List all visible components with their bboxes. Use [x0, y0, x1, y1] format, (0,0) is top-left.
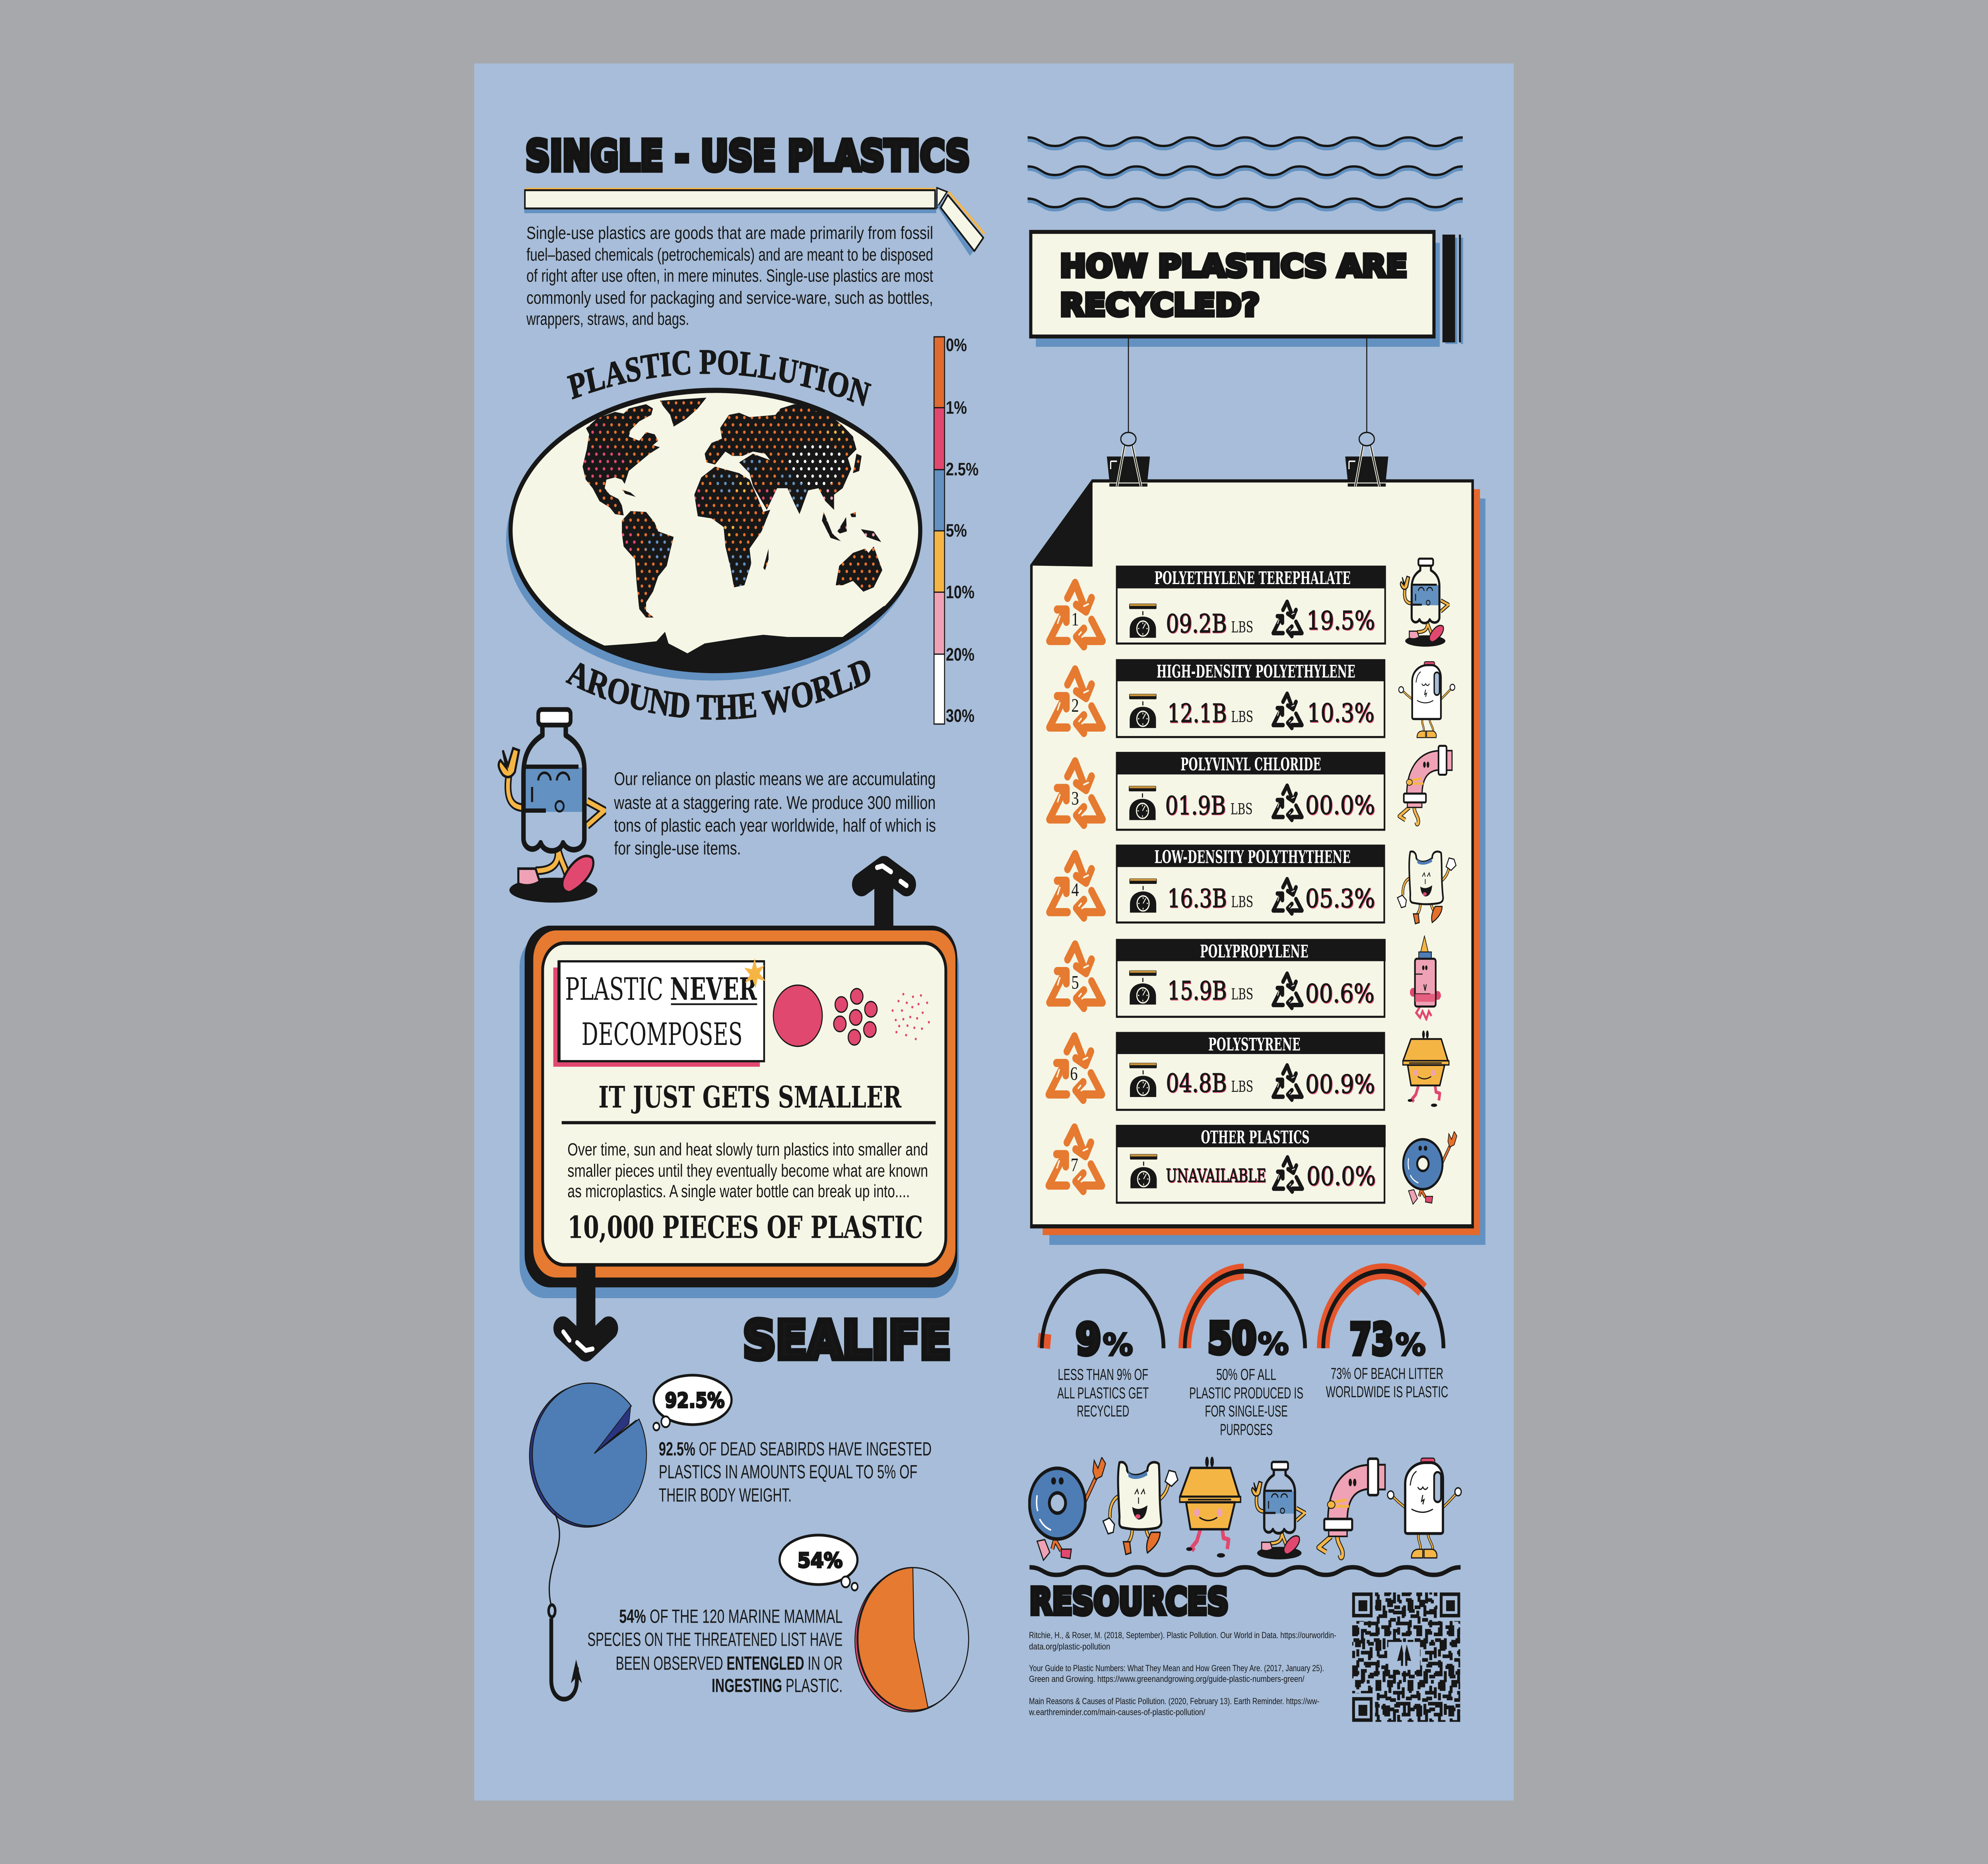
character: bottle row 1 [1400, 559, 1448, 647]
gauge: 50% single-use: % [1258, 1327, 1289, 1362]
references text: Ritchie, H., & Roser, M. (2018, September). Plastic Pollution. Our World in Data. https://ourworldin- [1029, 1631, 1336, 1640]
row 1: polyethylene terephalate: 1 [1072, 609, 1079, 630]
legend: colour scale: 20% [946, 644, 975, 664]
poster panel [474, 63, 1514, 1801]
row 3: polyvinyl chloride: 01.9B [1165, 790, 1226, 820]
callout: plastic never decomposes: PLASTIC NEVER [565, 971, 757, 1007]
reliance paragraph: for single-use items. [614, 838, 741, 858]
references text: data.org/plastic-pollution [1029, 1642, 1110, 1652]
character lineup [1029, 1456, 1461, 1560]
legend: colour scale: 0% [946, 334, 967, 355]
speech bubble: 92.5%: 92.5% [665, 1388, 724, 1413]
text: seabirds statistic [659, 1439, 932, 1506]
gauge: 9% recycled: ALL PLASTICS GET [1057, 1384, 1149, 1402]
row 4: low-density polythythene: 05.3% [1305, 883, 1375, 913]
heading: plastic pollution arc: PLASTIC POLLUTION [565, 342, 874, 414]
character: bottle mascot [499, 709, 604, 903]
row 2: high-density polyethylene: LBS [1231, 709, 1253, 726]
sign body text [567, 1139, 928, 1201]
callout: 10,000 pieces of plastic: 10,000 PIECES OF PLASTIC [567, 1210, 923, 1245]
speech bubble: 92.5% [653, 1375, 732, 1430]
speech bubble: 54% [780, 1535, 858, 1590]
panel: how plastics are recycled title board: RECYCLED? [1060, 287, 1260, 323]
row 5: polypropylene: 5 [1072, 972, 1079, 993]
hanging strings [1128, 338, 1367, 433]
row 6: polystyrene: 04.8B [1167, 1069, 1227, 1099]
gauge: 9% recycled: 9 [1076, 1315, 1101, 1364]
row 3: polyvinyl chloride: 00.0% [1306, 791, 1376, 821]
row 5: polypropylene: 15.9B [1167, 976, 1227, 1006]
row 6: polystyrene: 6 [1070, 1063, 1077, 1084]
speech bubble: 54%: 54% [798, 1549, 843, 1573]
gauge: 9% recycled: RECYCLED [1077, 1402, 1129, 1420]
intro paragraph: wrappers, straws, and bags. [526, 309, 689, 329]
legend: colour scale: 10% [946, 581, 975, 602]
text: marine mammals statistic: INGESTING PLASTIC. [712, 1676, 843, 1697]
callout: plastic never decomposes [553, 958, 766, 1067]
gauge: 73% beach litter: WORLDWIDE IS PLASTIC [1326, 1383, 1448, 1401]
intro paragraph: commonly used for packaging and service-ware, such as bottles, [526, 287, 933, 308]
intro paragraph: fuel–based chemicals (petrochemicals) and are meant to be disposed [526, 245, 933, 264]
icon: binder clip right [1345, 432, 1388, 487]
row 2: high-density polyethylene: 12.1B [1167, 699, 1227, 728]
references text: Your Guide to Plastic Numbers: What They Mean and How Green They Are. (2017, January 25). [1029, 1664, 1324, 1673]
text: marine mammals statistic [587, 1606, 843, 1697]
row 7: other plastics: 00.0% [1307, 1162, 1376, 1192]
row 4: low-density polythythene: LBS [1231, 893, 1253, 911]
references text: Main Reasons & Causes of Plastic Pollution. (2020, February 13). Earth Reminder. https://ww- [1029, 1697, 1319, 1706]
decorative waves [1028, 138, 1463, 210]
title: single-use plastics: SINGLE - USE PLASTICS [526, 131, 970, 181]
reliance paragraph: tons of plastic each year worldwide, half of which is [614, 815, 936, 836]
row 7: other plastics: 00.0% [1307, 1161, 1376, 1191]
row 1: polyethylene terephalate: POLYETHYLENE TEREPHALATE [1154, 568, 1351, 588]
row 1: polyethylene terephalate: 19.5% [1307, 606, 1375, 635]
row 1: polyethylene terephalate: LBS [1231, 619, 1253, 637]
character: pipe row 3 [1399, 746, 1452, 824]
character: donut row 7 [1403, 1132, 1457, 1204]
row 1: polyethylene terephalate [1049, 566, 1386, 647]
row 1: polyethylene terephalate: 19.5% [1307, 606, 1376, 636]
legend: colour scale: 5% [946, 520, 967, 540]
row 2: high-density polyethylene: 12.1B [1168, 699, 1227, 729]
row 7: other plastics: UNAVAILABLE [1167, 1165, 1267, 1187]
row 6: polystyrene: POLYSTYRENE [1208, 1035, 1301, 1055]
divider wave [1029, 1567, 1460, 1575]
row 5: polypropylene: 00.6% [1305, 979, 1375, 1008]
row 7: other plastics: UNAVAILABLE [1166, 1165, 1266, 1186]
sign body text: as microplastics. A single water bottle can break up into.... [567, 1181, 910, 1201]
pie chart: 54% marine mammals [855, 1568, 969, 1712]
references text: Green and Growing. https://www.greenandgrowing.org/guide-plastic-numbers-green/ [1029, 1674, 1305, 1684]
row 4: low-density polythythene: 16.3B [1168, 884, 1227, 914]
row 2: high-density polyethylene: 10.3% [1307, 698, 1375, 728]
row 7: other plastics: 7 [1071, 1155, 1078, 1176]
row 6: polystyrene: LBS [1231, 1078, 1253, 1096]
row 5: polypropylene [1049, 939, 1386, 1017]
gauge: 9% recycled: % [1103, 1328, 1133, 1363]
character: bag row 4 [1398, 851, 1456, 924]
row 6: polystyrene [1049, 1032, 1385, 1110]
gauge: 73% beach litter: % [1396, 1328, 1426, 1363]
row 7: other plastics: OTHER PLASTICS [1201, 1128, 1310, 1148]
sign body text: smaller pieces until they eventually become what are known [567, 1161, 928, 1181]
row 6: polystyrene: 04.8B [1166, 1068, 1227, 1098]
gauge: 50% single-use: 50 [1208, 1314, 1256, 1363]
row 3: polyvinyl chloride: 00.0% [1305, 790, 1375, 820]
row 4: low-density polythythene [1049, 845, 1385, 922]
pie chart: 92.5% seabirds [530, 1383, 646, 1527]
references text: w.earthreminder.com/main-causes-of-plastic-pollution/ [1029, 1708, 1206, 1717]
intro paragraph [526, 223, 933, 329]
row 2: high-density polyethylene: HIGH-DENSITY POLYETHYLENE [1157, 662, 1355, 682]
heading: resources: RESOURCES [1029, 1581, 1229, 1623]
gauge: 9% recycled: LESS THAN 9% OF [1058, 1365, 1148, 1383]
character: glue bottle row 5 [1410, 936, 1441, 1019]
row 6: polystyrene: 00.9% [1305, 1069, 1375, 1099]
gauge: 50% single-use [1185, 1271, 1305, 1439]
text: marine mammals statistic: SPECIES ON THE THREATENED LIST HAVE [587, 1629, 843, 1650]
heading: around the world arc: AROUND THE WORLD [563, 649, 876, 727]
row 5: polypropylene: POLYPROPYLENE [1200, 942, 1309, 962]
intro paragraph: Single-use plastics are goods that are made primarily from fossil [526, 223, 933, 243]
row 3: polyvinyl chloride: 01.9B [1166, 791, 1227, 821]
intro paragraph: of right after use often, in mere minutes. Single-use plastics are most [526, 266, 933, 285]
antarctica [604, 606, 884, 668]
sign body text: Over time, sun and heat slowly turn plastics into smaller and [567, 1139, 928, 1159]
row 7: other plastics [1049, 1125, 1386, 1203]
legend: colour scale [934, 334, 978, 726]
character: jug row 2 [1399, 662, 1455, 738]
callout: plastic never decomposes: DECOMPOSES [582, 1016, 743, 1052]
references text [1029, 1631, 1336, 1717]
gauge: 73% beach litter [1323, 1271, 1448, 1401]
panel: recycling codes paper [1030, 481, 1485, 1245]
subheading: it just gets smaller: IT JUST GETS SMALLER [598, 1080, 902, 1115]
arrow: up [862, 866, 907, 945]
icon: fishing line and hook [549, 1513, 582, 1699]
row 4: low-density polythythene: LOW-DENSITY POLYTHYTHENE [1154, 847, 1351, 868]
gauge: 73% beach litter: 73% OF BEACH LITTER [1331, 1365, 1443, 1382]
icon: binder clip left [1107, 432, 1150, 487]
reliance paragraph: Our reliance on plastic means we are accumulating [614, 768, 936, 789]
continents [582, 398, 882, 618]
gauge: 50% single-use: FOR SINGLE-USE [1205, 1402, 1288, 1420]
row 1: polyethylene terephalate: 09.2B [1167, 610, 1227, 639]
row 2: high-density polyethylene [1049, 659, 1385, 737]
legend: colour scale: 1% [946, 397, 967, 417]
text: seabirds statistic: PLASTICS IN AMOUNTS EQUAL TO 5% OF [659, 1462, 917, 1483]
panel: how plastics are recycled title board: HOW PLASTICS ARE [1060, 248, 1408, 284]
row 5: polypropylene: 00.6% [1306, 979, 1375, 1009]
panel: plastic never decomposes sign [520, 926, 959, 1298]
gauge: 50% single-use: PURPOSES [1220, 1420, 1273, 1439]
text: marine mammals statistic: 54% OF THE 120 MARINE MAMMAL [619, 1606, 843, 1627]
row 4: low-density polythythene: 16.3B [1167, 883, 1227, 913]
gauge: 50% single-use: PLASTIC PRODUCED IS [1189, 1384, 1303, 1402]
row 4: low-density polythythene: 4 [1072, 880, 1079, 901]
row 2: high-density polyethylene: 2 [1072, 695, 1079, 716]
row 3: polyvinyl chloride: POLYVINYL CHLORIDE [1180, 755, 1321, 775]
text: seabirds statistic: THEIR BODY WEIGHT. [659, 1485, 792, 1506]
heading: sealife: SEALIFE [743, 1310, 951, 1371]
row 5: polypropylene: LBS [1231, 986, 1253, 1003]
row 2: high-density polyethylene: 10.3% [1308, 699, 1375, 728]
gauge: 73% beach litter: 73 [1349, 1315, 1393, 1364]
row 5: polypropylene: 15.9B [1168, 977, 1227, 1006]
row 3: polyvinyl chloride [1049, 752, 1385, 830]
character: food container row 6 [1403, 1031, 1449, 1107]
text: marine mammals statistic: BEEN OBSERVED ENTENGLED IN OR [615, 1653, 843, 1674]
world map globe [506, 390, 925, 689]
panel: how plastics are recycled title board [1031, 232, 1463, 347]
reliance paragraph: waste at a staggering rate. We produce 300 million [613, 792, 936, 813]
reliance paragraph [613, 768, 936, 858]
text: seabirds statistic: 92.5% OF DEAD SEABIRDS HAVE INGESTED [659, 1439, 932, 1460]
legend: colour scale: 30% [946, 705, 975, 726]
gauge: 50% single-use: 50% OF ALL [1216, 1365, 1276, 1383]
row 1: polyethylene terephalate: 09.2B [1166, 609, 1227, 639]
icon: plastic fragmentation circles [773, 985, 930, 1047]
row 3: polyvinyl chloride: LBS [1231, 801, 1253, 818]
QR code [1352, 1592, 1460, 1722]
legend: colour scale: 2.5% [946, 459, 978, 479]
row 3: polyvinyl chloride: 3 [1072, 788, 1079, 809]
row 4: low-density polythythene: 05.3% [1306, 884, 1376, 914]
gauge: 9% recycled [1042, 1271, 1163, 1420]
arrow: down [563, 1265, 609, 1350]
icon: bent straw [524, 188, 984, 256]
row 6: polystyrene: 00.9% [1306, 1070, 1376, 1100]
